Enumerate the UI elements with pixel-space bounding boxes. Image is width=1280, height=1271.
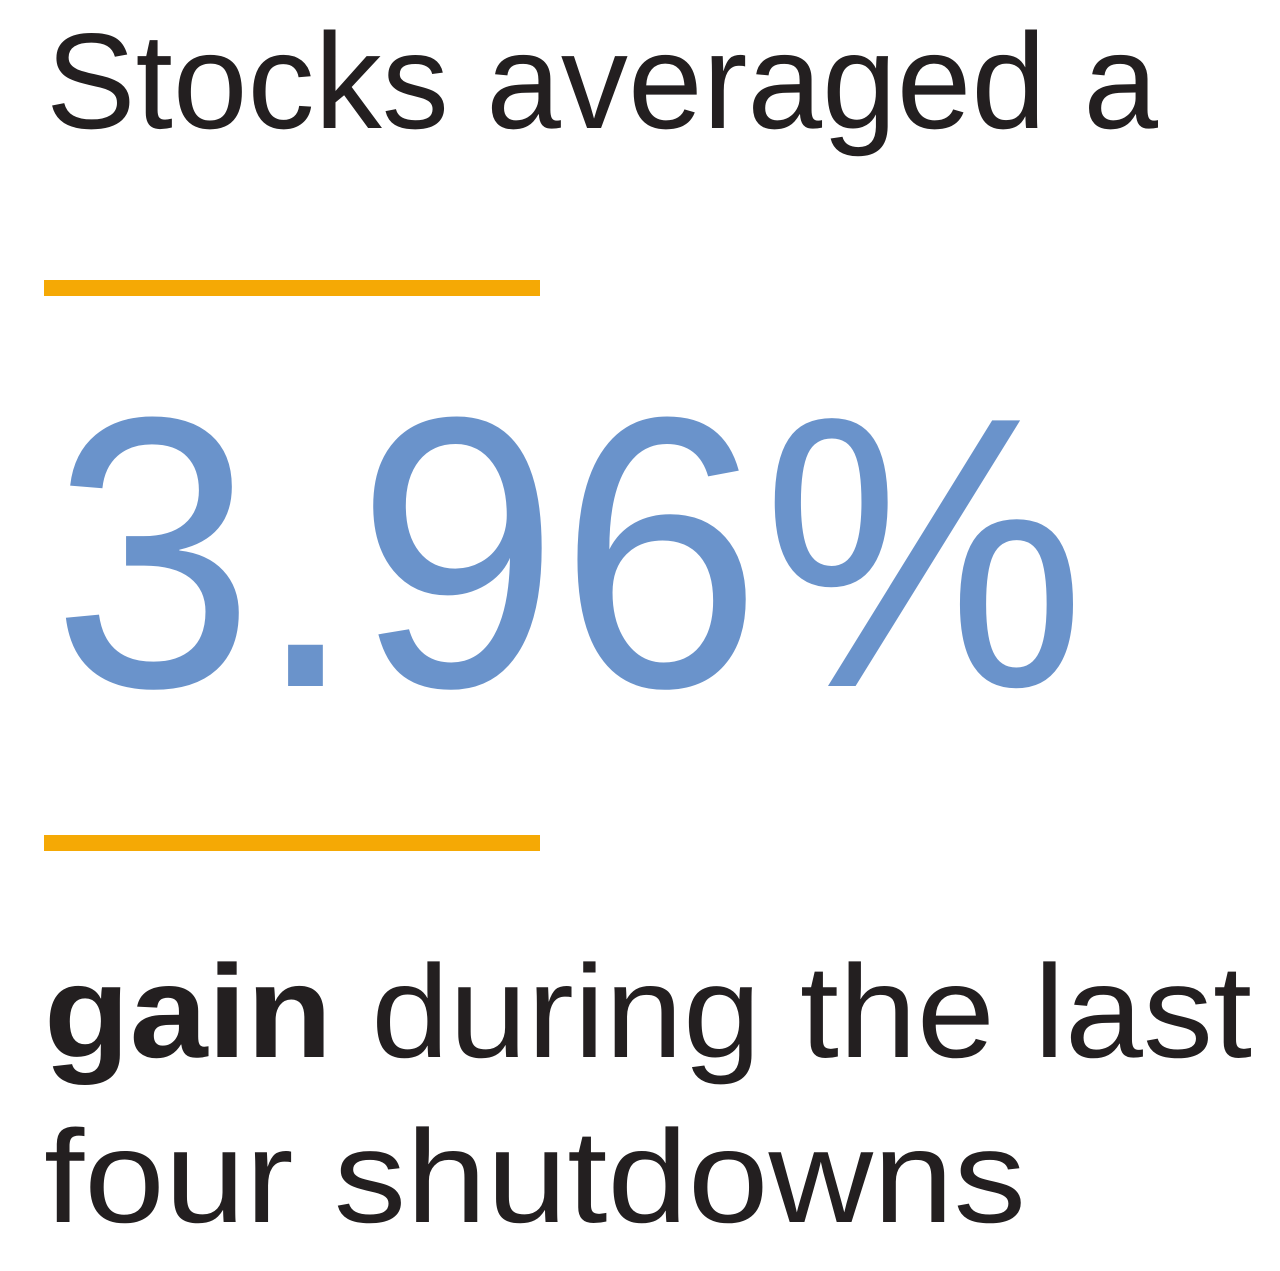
text: four shutdowns: four shutdowns (44, 1103, 1026, 1250)
divider: top orange bar (44, 280, 540, 296)
heading: stocks averaged a: Stocks averaged a (46, 5, 1158, 157)
big number: 3.96%: 3.96% (52, 337, 1086, 768)
text: gain during the last: gain during the last (44, 938, 1252, 1085)
divider: bottom orange bar (44, 835, 540, 851)
